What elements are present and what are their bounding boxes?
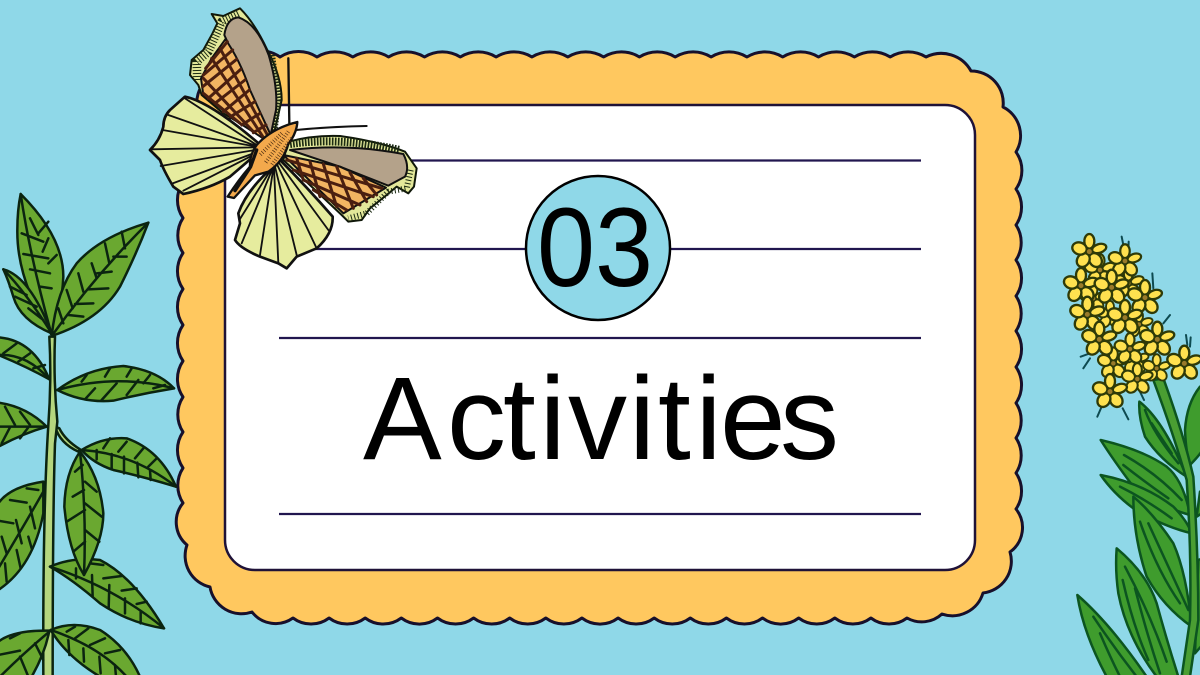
leaves	[1077, 387, 1200, 675]
stray stamens	[1081, 237, 1191, 419]
notebook ruled lines	[279, 160, 921, 514]
yellow flower cluster	[1062, 234, 1200, 409]
stem	[1153, 378, 1198, 675]
left leafy plant	[0, 194, 176, 675]
title: Activities	[363, 353, 839, 485]
scalloped yellow frame	[176, 51, 1022, 624]
body	[228, 122, 297, 198]
white notebook card	[225, 105, 975, 570]
antennae	[288, 58, 367, 130]
number badge: 03	[537, 185, 653, 310]
lower left wing	[150, 97, 259, 194]
leaves	[0, 194, 176, 675]
lower wing	[235, 160, 333, 268]
butterfly	[150, 8, 417, 268]
upper left wing	[190, 8, 282, 141]
right flowering plant	[1062, 234, 1200, 675]
right wing	[283, 136, 417, 222]
stem	[43, 337, 80, 675]
